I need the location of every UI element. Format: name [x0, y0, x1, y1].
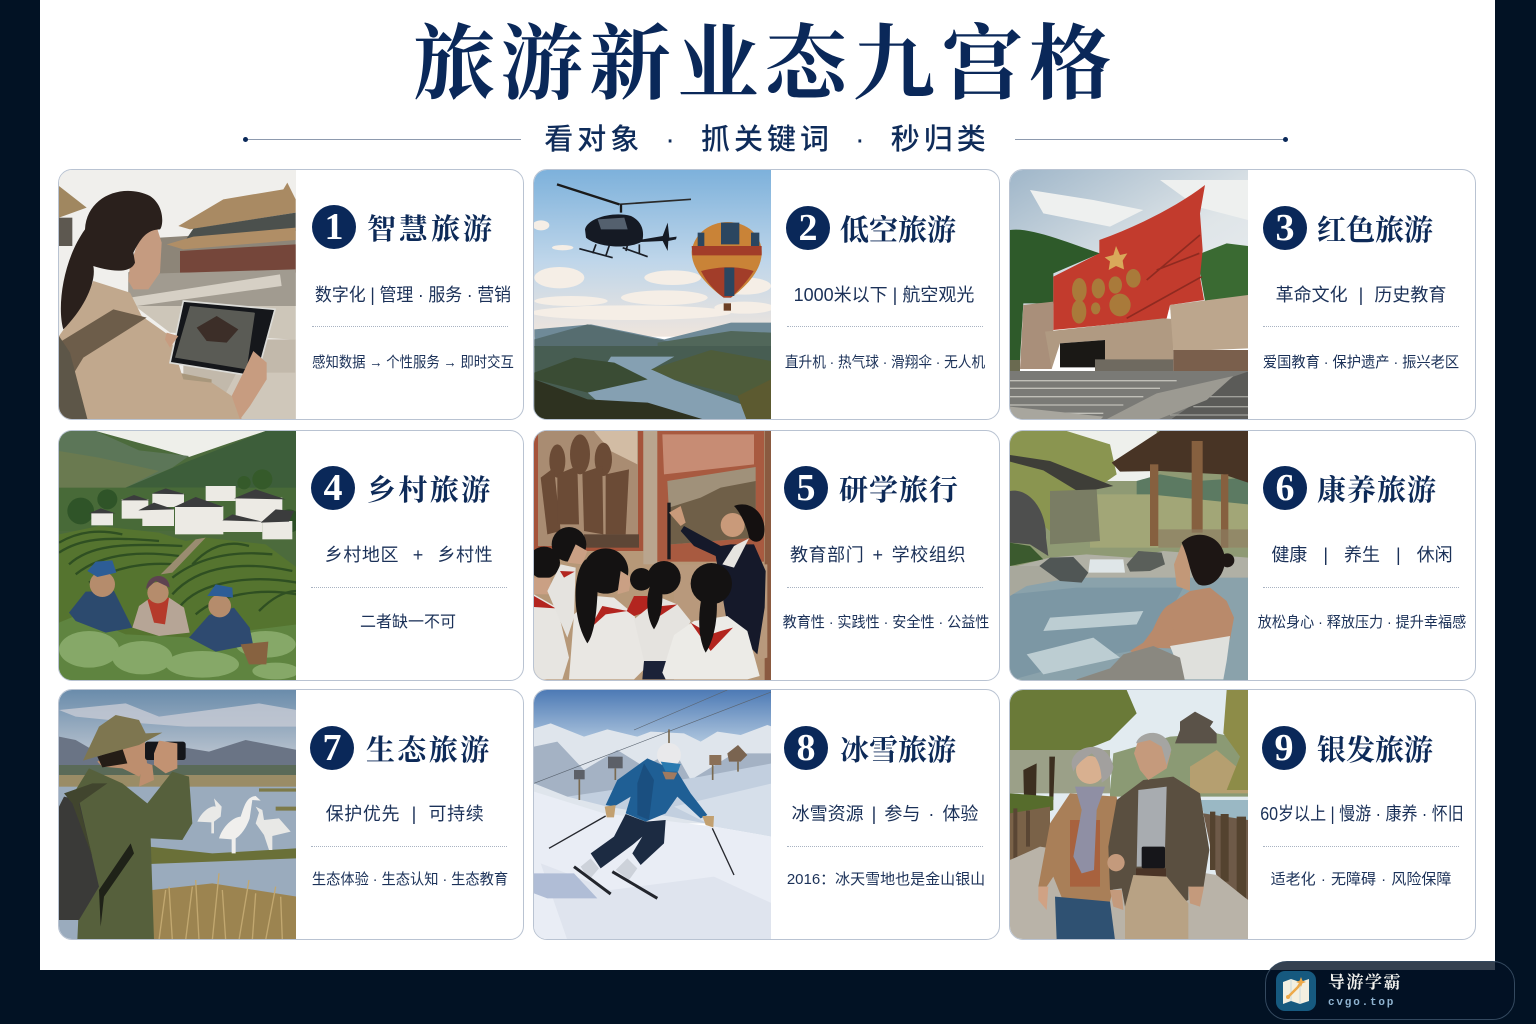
icon: number 3: [1263, 206, 1307, 250]
keywords: 1000米以下 | 航空观光: [794, 285, 974, 305]
icon: number 2: 2: [798, 207, 818, 249]
photo: elderly couple walking: [1010, 690, 1248, 939]
icon: number 5: [784, 466, 828, 510]
icon: number 9: [1262, 726, 1306, 770]
details: 适老化 · 无障碍 · 风险保障: [1271, 871, 1451, 888]
logo badge: [1265, 961, 1515, 1020]
heading: 红色旅游: 红色旅游: [1317, 215, 1433, 247]
brand url: cvgo.top: [1328, 997, 1395, 1009]
photo: museum study group: [534, 431, 771, 680]
icon: number 3: 3: [1276, 207, 1294, 249]
photo: birdwatcher and egrets: [59, 690, 296, 939]
panel: card 9 银发旅游: [1009, 689, 1476, 940]
keywords: 保护优先 | 可持续: [326, 804, 484, 824]
icon: number 4: [311, 466, 355, 510]
panel: card 8 冰雪旅游: [533, 689, 1000, 940]
brand name: 导游学霸: [1328, 973, 1402, 992]
title: 旅游新业态九宫格: [413, 19, 1117, 110]
heading: 康养旅游: 康养旅游: [1317, 475, 1437, 507]
photo: red memorial: [1010, 170, 1248, 419]
panel: card 6 康养旅游: [1009, 430, 1476, 681]
icon: number 2: [786, 206, 830, 250]
heading: 研学旅行: 研学旅行: [839, 475, 959, 507]
icon: number 5: 5: [796, 467, 816, 509]
photo: village tea terraces: [59, 431, 296, 680]
keywords: 乡村地区 + 乡村性: [325, 545, 493, 565]
subtitle with rules: [243, 124, 1288, 156]
icon: number 8: 8: [796, 727, 816, 769]
keywords: 冰雪资源 | 参与 · 体验: [792, 804, 978, 824]
panel: card 4 乡村旅游: [58, 430, 524, 681]
details: 爱国教育 · 保护遗产 · 振兴老区: [1263, 354, 1459, 371]
icon: number 1: 1: [324, 206, 344, 248]
icon: number 6: [1263, 466, 1307, 510]
panel: card 1 智慧旅游: [58, 169, 524, 420]
subtitle with rules: 看对象 · 抓关键词 · 秒归类: [544, 124, 990, 156]
heading: 生态旅游: 生态旅游: [366, 735, 492, 767]
heading: 低空旅游: 低空旅游: [840, 215, 956, 247]
icon: number 1: [312, 205, 356, 249]
details: 2016：冰天雪地也是金山银山: [787, 871, 985, 888]
icon: number 8: [784, 726, 828, 770]
keywords: 数字化 | 管理 · 服务 · 营销: [315, 285, 511, 305]
icon: map: [1276, 971, 1316, 1011]
panel: card 2 低空旅游: [533, 169, 1000, 420]
keywords: 60岁以上 | 慢游 · 康养 · 怀旧: [1260, 804, 1464, 824]
keywords: 教育部门 + 学校组织: [790, 545, 966, 565]
icon: number 6: 6: [1276, 467, 1294, 509]
details: 生态体验 · 生态认知 · 生态教育: [312, 871, 508, 888]
icon: number 9: 9: [1274, 727, 1294, 769]
heading: 乡村旅游: 乡村旅游: [367, 475, 493, 507]
photo: hot spring: [1010, 431, 1248, 680]
icon: number 4: 4: [324, 467, 342, 509]
photo: skier on slope: [534, 690, 771, 939]
panel: card 7 生态旅游: [58, 689, 524, 940]
heading: 冰雪旅游: 冰雪旅游: [840, 735, 956, 767]
panel: card 5 研学旅行: [533, 430, 1000, 681]
details: 教育性 · 实践性 · 安全性 · 公益性: [783, 614, 989, 631]
details: 放松身心 · 释放压力 · 提升幸福感: [1258, 614, 1466, 631]
icon: number 7: 7: [322, 727, 342, 769]
photo: tourist with tablet at palace: [59, 170, 296, 419]
details: 直升机 · 热气球 · 滑翔伞 · 无人机: [785, 354, 985, 371]
details: 二者缺一不可: [360, 614, 456, 631]
details: 感知数据 → 个性服务 → 即时交互: [312, 354, 514, 371]
keywords: 健康 | 养生 | 休闲: [1271, 545, 1453, 565]
keywords: 革命文化 | 历史教育: [1276, 285, 1446, 305]
heading: 银发旅游: 银发旅游: [1317, 735, 1433, 767]
icon: number 7: [310, 726, 354, 770]
photo: helicopter and balloon over lake: [534, 170, 771, 419]
panel: card 3 红色旅游: [1009, 169, 1476, 420]
heading: 智慧旅游: 智慧旅游: [367, 214, 495, 246]
